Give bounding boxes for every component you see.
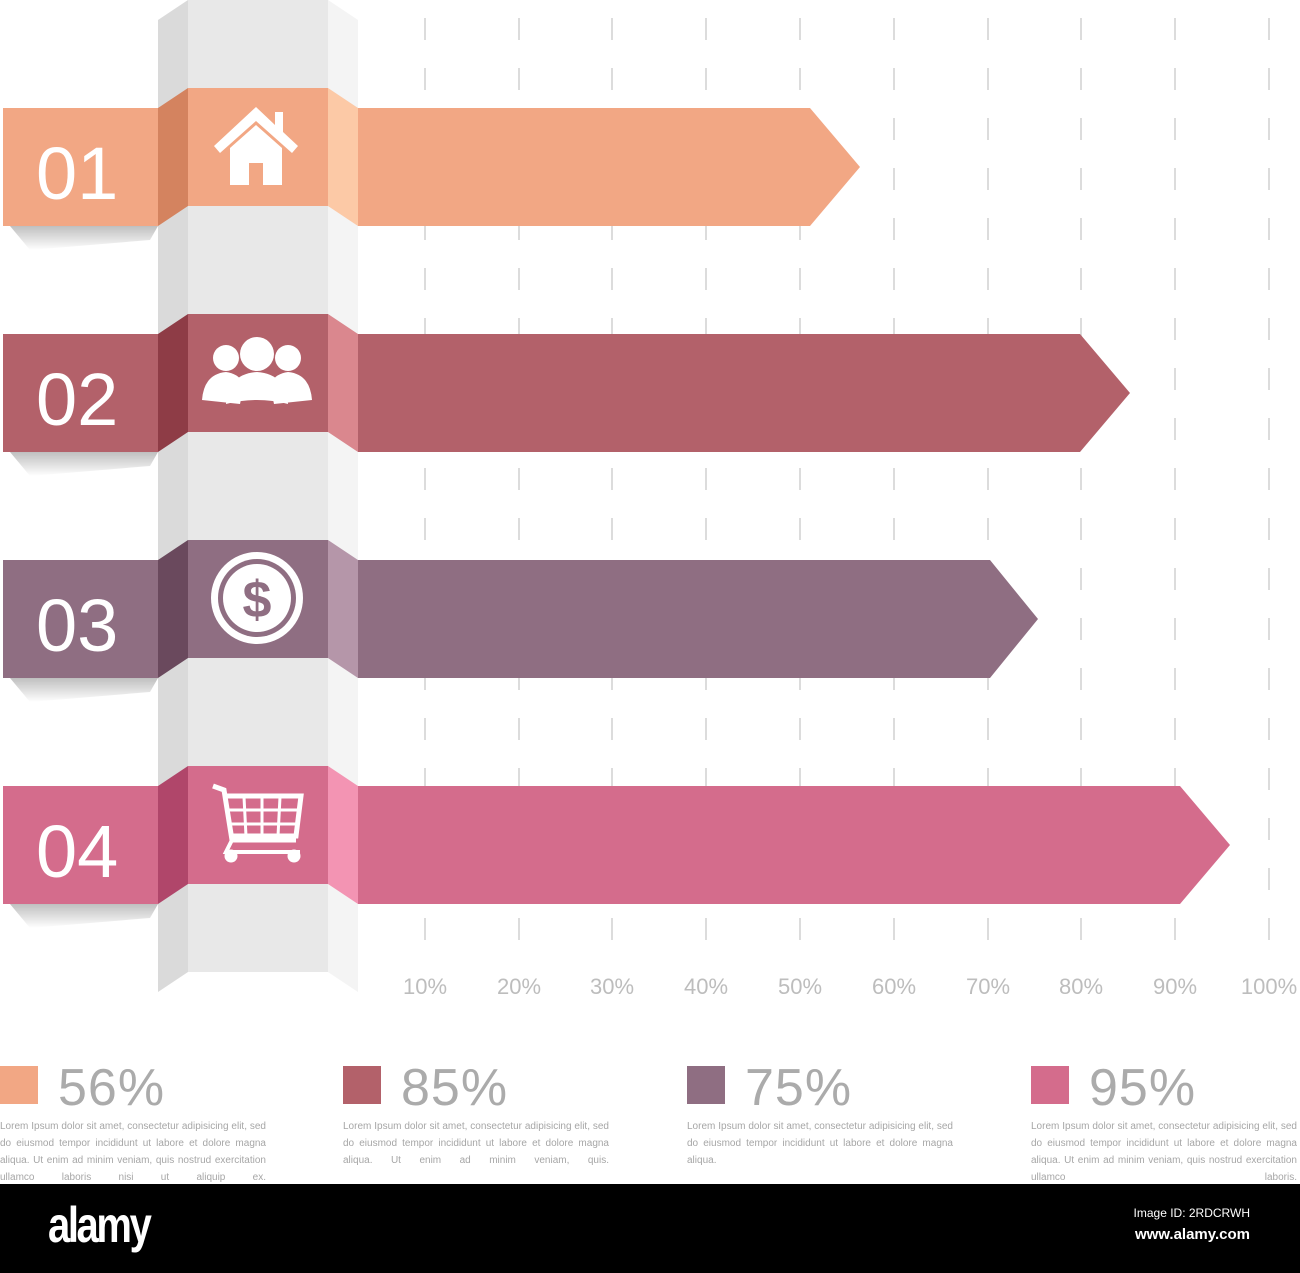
column: [158, 0, 358, 992]
axis labels: 10%: [403, 974, 447, 999]
text: Lorem Ipsum dolor sit amet, consectetur adipisicing elit, sed do eiusmod tempor incididunt ut labore et dolore magna aliqua. Ut enim ad minim veniam, quis nostrud exercitation ullamco laboris nisi ut aliquip ex.: [0, 1121, 266, 1183]
icon: house: [214, 107, 298, 185]
footer text: Image ID: 2RDCRWH: [1134, 1206, 1250, 1220]
row 02: [3, 314, 1130, 476]
icon: dollar coin: [211, 552, 303, 644]
row 01: 01: [36, 132, 118, 215]
icon: dollar coin: $: [243, 571, 272, 629]
axis labels: 70%: [966, 974, 1010, 999]
text: Lorem Ipsum dolor sit amet, consectetur adipisicing elit, sed do eiusmod tempor incididunt ut labore et dolore magna aliqua. Ut enim ad minim veniam, quis nostrud exercitation ullamco laboris.: [1031, 1121, 1297, 1183]
legend 75%: [687, 1059, 953, 1166]
legend 95%: [1031, 1059, 1297, 1183]
legend 85%: [343, 1059, 609, 1166]
axis labels: 60%: [872, 974, 916, 999]
text: 75%: [745, 1059, 852, 1117]
footer text: www.alamy.com: [1135, 1226, 1250, 1243]
axis labels: 40%: [684, 974, 728, 999]
icon: cart: [213, 786, 301, 860]
axis labels: 90%: [1153, 974, 1197, 999]
axis labels: 20%: [497, 974, 541, 999]
icon: people: [202, 337, 312, 404]
axis labels: [403, 974, 1297, 999]
row 02: 02: [36, 358, 118, 441]
footer bar: [0, 1184, 1300, 1273]
row 04: 04: [36, 810, 118, 893]
row 03: [3, 540, 1038, 702]
axis labels: 100%: [1241, 974, 1297, 999]
text: 56%: [58, 1059, 165, 1117]
text: Lorem Ipsum dolor sit amet, consectetur adipisicing elit, sed do eiusmod tempor incididunt ut labore et dolore magna aliqua. Ut enim ad minim veniam, quis.: [343, 1121, 609, 1166]
row 03: 03: [36, 584, 118, 667]
row 01: [3, 88, 860, 250]
axis labels: 30%: [590, 974, 634, 999]
footer text: [1134, 1206, 1250, 1243]
text: 85%: [401, 1059, 508, 1117]
text: 95%: [1089, 1059, 1196, 1117]
legend 56%: [0, 1059, 266, 1183]
row 04: [3, 766, 1230, 928]
text: Lorem Ipsum dolor sit amet, consectetur adipisicing elit, sed do eiusmod tempor incididunt ut labore et dolore magna aliqua.: [687, 1121, 953, 1166]
grid lines: [425, 18, 1269, 960]
axis labels: 50%: [778, 974, 822, 999]
footer logo: alamy: [48, 1197, 149, 1253]
axis labels: 80%: [1059, 974, 1103, 999]
